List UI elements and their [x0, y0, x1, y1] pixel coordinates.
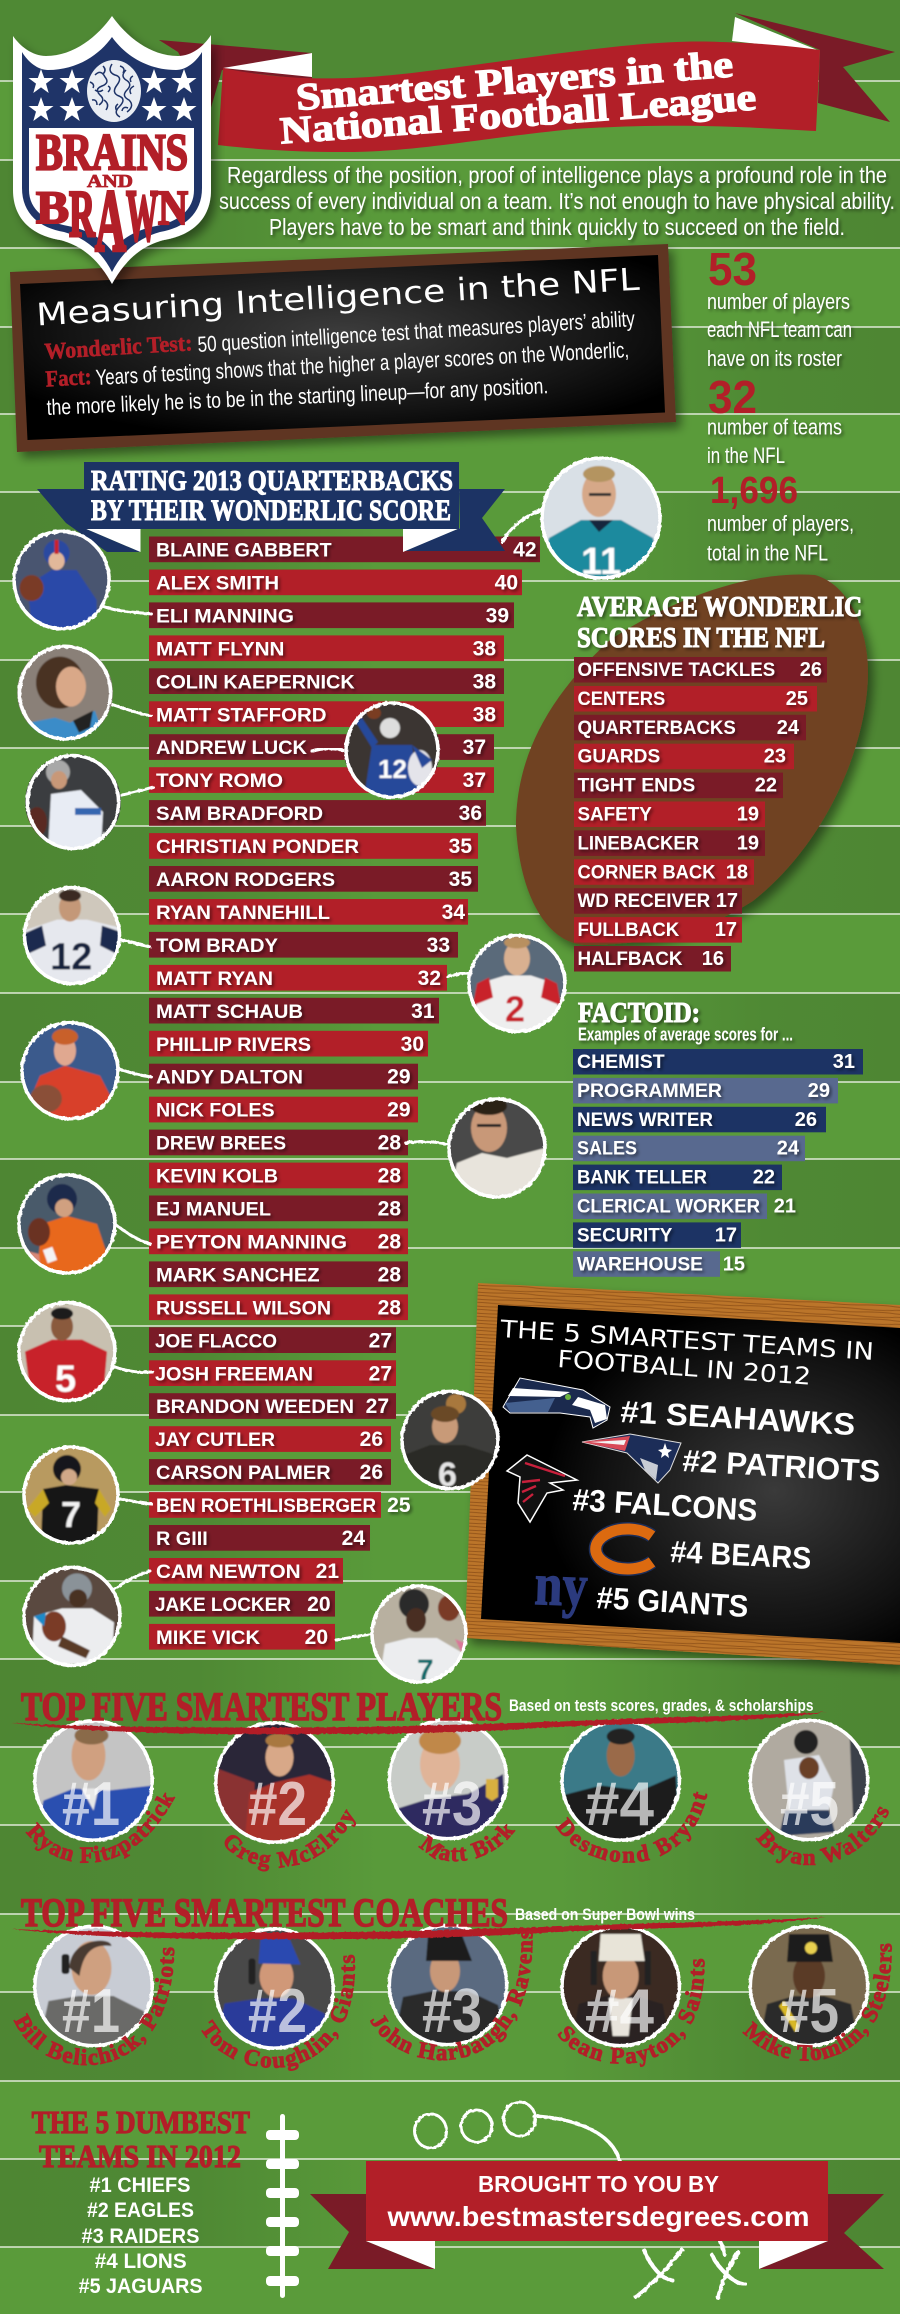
team: patriots — [582, 1434, 881, 1489]
bar: Joe Flacco 27 — [149, 1327, 396, 1353]
bar: Eli Manning 39: ELI MANNING — [156, 605, 294, 627]
bar: corner back 18: CORNER BACK — [578, 862, 716, 883]
bar: EJ Manuel 28: 28 — [378, 1198, 401, 1220]
bar: Mike Vick 20: 20 — [305, 1626, 328, 1649]
bar: security 17: SECURITY — [577, 1225, 673, 1246]
bar: Nick Foles 29 — [149, 1097, 418, 1122]
portrait: Russell Wilson: 5 — [55, 1359, 76, 1401]
shield logo: brains and brawn: N — [158, 180, 188, 235]
chalkboard: measuring intelligence: the more likely he is to be in the starting lineup—for any position. — [46, 373, 549, 420]
bar: Kevin Kolb 28: KEVIN KOLB — [156, 1166, 278, 1188]
bar: Alex Smith 40 — [149, 570, 522, 595]
bar: Kevin Kolb 28: 28 — [378, 1165, 401, 1188]
stats: roster numbers: number of players, — [707, 511, 854, 536]
shield logo: brains and brawn — [13, 16, 211, 284]
bar: Mark Sanchez 28: 28 — [378, 1263, 401, 1286]
title ribbon — [159, 13, 895, 152]
bar: Ryan Tannehill 34 — [149, 899, 468, 925]
stats: roster numbers: each NFL team can — [707, 317, 852, 342]
bar: programmer 29: PROGRAMMER — [577, 1081, 722, 1102]
bar: Andy Dalton 29: ANDY DALTON — [156, 1067, 303, 1089]
team: bears: #4 BEARS — [670, 1534, 812, 1576]
shield logo: brains and brawn: BRAINS — [36, 125, 188, 182]
bar: Aaron Rodgers 35 — [149, 866, 478, 892]
bar: Matt Ryan 32: MATT RYAN — [156, 968, 273, 990]
bar: Aaron Rodgers 35: AARON RODGERS — [156, 869, 335, 891]
bar: Josh Freeman 27 — [149, 1360, 396, 1386]
bar: Matt Stafford 38: 38 — [473, 703, 496, 726]
bar: Christian Ponder 35 — [149, 833, 478, 859]
heading: average wonderlic scores — [577, 592, 862, 654]
bar: news writer 26: 26 — [795, 1109, 817, 1131]
bar: corner back 18 — [574, 859, 754, 885]
bar: Ben Roethlisberger 25: 25 — [387, 1494, 411, 1517]
bar: programmer 29 — [573, 1078, 838, 1103]
rank overlays: #5 — [780, 1770, 839, 1839]
curved coach names: Sean Payton, Saints — [558, 1958, 705, 2067]
bar: Tony Romo 37 — [149, 767, 494, 793]
portrait: Drew Brees — [449, 1097, 545, 1197]
bar: Tom Brady 33 — [149, 932, 458, 958]
bar: Andy Dalton 29 — [149, 1064, 418, 1089]
bar: Matt Flynn 38: 38 — [473, 637, 496, 660]
portrait: Greg McElroy — [214, 1722, 334, 1842]
bar: Peyton Manning 28 — [149, 1228, 408, 1254]
team: falcons — [507, 1455, 758, 1528]
stats: roster numbers: number of players — [707, 289, 850, 314]
curved player names: Matt Birk — [418, 1824, 516, 1862]
portrait: Tom Brady — [24, 888, 120, 984]
portrait: Desmond Bryant — [562, 1720, 680, 1840]
bar: quarterbacks 24: QUARTERBACKS — [578, 718, 736, 739]
portrait: Brandon Weeden: 6 — [438, 1456, 457, 1494]
bar: Colin Kaepernick 38 — [149, 668, 504, 694]
banner: brought to you by — [310, 2161, 884, 2269]
chalkboard: measuring intelligence: Years of testing shows that the higher a player scores on the Wonderlic, — [95, 337, 630, 390]
stats: roster numbers: in the NFL — [707, 443, 785, 468]
portrait connectors — [98, 510, 542, 1640]
bar: Nick Foles 29: 29 — [387, 1099, 410, 1122]
bar: Jay Cutler 26: JAY CUTLER — [155, 1429, 275, 1451]
portrait: Matt Birk — [389, 1719, 507, 1839]
chalkboard: measuring intelligence: Wonderlic Test: — [44, 330, 193, 364]
bar: Russell Wilson 28 — [149, 1294, 408, 1320]
portrait: Matt Ryan — [469, 936, 565, 1032]
bar: guards 23: 23 — [764, 746, 786, 768]
curved player names: Bryan Walters — [755, 1806, 889, 1866]
blue banner: rating quarterbacks: RATING 2013 QUARTERBACKS — [91, 466, 453, 497]
stats: roster numbers: have on its roster — [707, 346, 842, 371]
rank overlays: #1 — [62, 1770, 120, 1839]
title ribbon: National Football League — [279, 76, 757, 152]
chalkboard: measuring intelligence: 50 question intelligence test that measures players’ ability — [197, 306, 636, 357]
bar: halfback 16: HALFBACK — [578, 949, 683, 970]
bar: Tony Romo 37: TONY ROMO — [156, 770, 283, 792]
bar: Matt Schaub 31 — [149, 998, 439, 1024]
rank overlays: #3 — [422, 1977, 482, 2046]
panel: five dumbest teams: TEAMS IN 2012 — [39, 2138, 241, 2174]
bar: Brandon Weeden 27: 27 — [366, 1395, 389, 1418]
bar: Carson Palmer 26: CARSON PALMER — [156, 1462, 331, 1484]
chalkboard: measuring intelligence: Measuring Intelligence in the NFL — [35, 262, 641, 333]
portrait: Mike Vick: 7 — [417, 1654, 434, 1687]
bar: Sam Bradford 36 — [149, 800, 486, 826]
chalkboard: five smartest teams: THE 5 SMARTEST TEAMS IN — [498, 1315, 875, 1366]
chalkboard: measuring intelligence — [10, 244, 676, 452]
bar: offensive tackles 26 — [574, 657, 827, 682]
factoid subheading: Examples of average scores for ... — [578, 1024, 793, 1044]
portrait: Ben Roethlisberger — [23, 1447, 119, 1543]
quarterback score bars — [149, 536, 540, 1650]
bar: EJ Manuel 28 — [149, 1196, 408, 1221]
bar: Andrew Luck 37 — [149, 734, 494, 760]
bar: Brandon Weeden 27 — [149, 1393, 396, 1419]
bar: safety 19: 19 — [737, 804, 759, 826]
bar: offensive tackles 26: 26 — [800, 659, 822, 681]
bar: sales 24 — [573, 1136, 805, 1161]
bar: Cam Newton 21: CAM NEWTON — [156, 1561, 301, 1583]
panel: five dumbest teams: #2 EAGLES — [87, 2199, 194, 2222]
bar: Cam Newton 21: 21 — [316, 1560, 339, 1583]
bar: Phillip Rivers 30 — [149, 1031, 428, 1056]
bar: fullback 17: 17 — [715, 919, 737, 941]
bar: clerical worker 21: CLERICAL WORKER — [577, 1196, 760, 1218]
bar: Peyton Manning 28: PEYTON MANNING — [156, 1232, 347, 1254]
bar: tight ends 22 — [574, 773, 783, 798]
bar: corner back 18: 18 — [726, 861, 748, 883]
bar: Josh Freeman 27: JOSH FREEMAN — [155, 1363, 313, 1385]
bar: news writer 26 — [573, 1107, 826, 1132]
portrait: Matt Ryan: 2 — [505, 988, 525, 1030]
bar: Josh Freeman 27: 27 — [369, 1362, 392, 1385]
bar: halfback 16 — [574, 946, 731, 972]
shield logo: brains and brawn: B — [36, 182, 69, 234]
blue banner: rating quarterbacks — [37, 462, 505, 552]
bar: wd receiver 17: 17 — [716, 890, 738, 912]
rank overlays: #4 — [585, 1977, 655, 2046]
bar: Jay Cutler 26 — [149, 1426, 391, 1452]
panel: five dumbest teams: THE 5 DUMBEST — [32, 2104, 250, 2140]
bar: clerical worker 21: 21 — [774, 1196, 796, 1218]
bar: clerical worker 21 — [573, 1194, 796, 1219]
bar: Eli Manning 39 — [149, 602, 514, 628]
bar: EJ Manuel 28: EJ MANUEL — [156, 1198, 271, 1220]
bar: Drew Brees 28: 28 — [378, 1132, 401, 1155]
rank overlays: #3 — [422, 1770, 482, 1839]
bar: Colin Kaepernick 38: 38 — [473, 670, 496, 693]
bar: Carson Palmer 26: 26 — [360, 1461, 383, 1484]
bar: Joe Flacco 27: 27 — [369, 1329, 392, 1352]
bar: Andy Dalton 29: 29 — [387, 1066, 410, 1089]
bar: Russell Wilson 28: RUSSELL WILSON — [156, 1297, 331, 1319]
portrait: Sean Payton — [562, 1926, 680, 2046]
portrait: Russell Wilson — [19, 1303, 115, 1401]
bar: Drew Brees 28: DREW BREES — [156, 1133, 286, 1155]
bar: Jake Locker 20: 20 — [307, 1593, 330, 1616]
portrait: Matt Stafford — [17, 645, 113, 741]
bar: offensive tackles 26: OFFENSIVE TACKLES — [578, 660, 775, 681]
portrait: Mike Vick — [371, 1586, 467, 1687]
bar: centers 25 — [574, 686, 817, 712]
team: seahawks — [503, 1378, 856, 1442]
panel: average wonderlic scores — [574, 592, 862, 972]
bar: Christian Ponder 35: 35 — [449, 835, 472, 858]
bar: Andrew Luck 37: 37 — [463, 736, 486, 759]
stats: roster numbers: number of teams — [707, 415, 842, 440]
bar: quarterbacks 24: 24 — [777, 717, 800, 739]
heading: top five smartest coaches: TOP FIVE SMARTEST COACHES — [21, 1890, 508, 1935]
bar: chemist 31: CHEMIST — [577, 1052, 665, 1073]
shield logo: brains and brawn: R — [69, 177, 96, 251]
bar: Drew Brees 28 — [149, 1130, 408, 1155]
bar: quarterbacks 24 — [574, 715, 806, 740]
bar: Phillip Rivers 30: PHILLIP RIVERS — [156, 1034, 311, 1056]
bar: Kevin Kolb 28 — [149, 1163, 408, 1188]
bar: Mike Vick 20: MIKE VICK — [156, 1627, 260, 1649]
bar: Mike Vick 20 — [149, 1624, 335, 1650]
bar: Cam Newton 21 — [149, 1558, 343, 1584]
stats: roster numbers: 53 — [708, 243, 757, 295]
bar: Tony Romo 37: 37 — [463, 769, 486, 792]
curved coach names — [13, 1933, 892, 2071]
chalk play diagram — [414, 2102, 745, 2298]
portrait: Ben Roethlisberger: 7 — [61, 1494, 81, 1535]
brush underline — [11, 1712, 826, 1734]
bar: safety 19: SAFETY — [578, 804, 652, 826]
bar: Tom Brady 33: TOM BRADY — [156, 935, 278, 957]
curved coach names: John Harbaugh, Ravens — [370, 1933, 533, 2061]
bar: Nick Foles 29: NICK FOLES — [156, 1100, 274, 1122]
bar: Colin Kaepernick 38: COLIN KAEPERNICK — [156, 671, 355, 693]
portrait: Andrew Luck: 12 — [378, 754, 407, 784]
portrait: Tony Romo — [25, 754, 121, 850]
portrait: Bryan Walters — [750, 1720, 868, 1840]
bar: Brandon Weeden 27: BRANDON WEEDEN — [156, 1396, 354, 1418]
bar: Alex Smith 40: 40 — [495, 572, 518, 594]
bar: programmer 29: 29 — [808, 1080, 830, 1102]
shield logo: brains and brawn: A — [95, 171, 126, 269]
portrait: Eli Manning — [14, 531, 110, 629]
bar: Jake Locker 20: JAKE LOCKER — [155, 1594, 291, 1616]
portrait: Andy Dalton — [22, 1023, 118, 1119]
portrait: Blaine Gabbert — [541, 458, 661, 583]
bar: halfback 16: 16 — [702, 948, 724, 970]
bar: sales 24: SALES — [577, 1139, 637, 1160]
curved coach names: Tom Coughlin, Giants — [201, 1954, 356, 2071]
bar: Matt Ryan 32: 32 — [418, 967, 441, 990]
team: giants — [534, 1551, 749, 1624]
bar: Matt Stafford 38 — [149, 701, 504, 727]
team: giants: #5 GIANTS — [596, 1580, 749, 1624]
bar: linebacker 19: 19 — [737, 832, 759, 854]
icon: stars — [28, 69, 196, 121]
bar: Carson Palmer 26 — [149, 1459, 391, 1485]
stats: roster numbers: 1,696 — [710, 470, 798, 512]
bar: R GIII 24: 24 — [342, 1527, 365, 1550]
bar: Matt Schaub 31: MATT SCHAUB — [156, 1001, 303, 1023]
portrait: Tom Brady: 12 — [50, 937, 92, 979]
subheading: based on tests: Based on tests scores, grades, & scholarships — [509, 1696, 814, 1715]
heading: average wonderlic scores: SCORES IN THE NFL — [577, 623, 825, 654]
bar: warehouse 15: 15 — [723, 1253, 745, 1275]
panel: factoid scores — [573, 997, 863, 1277]
panel: five dumbest teams — [32, 2104, 250, 2298]
bar: chemist 31: 31 — [833, 1051, 855, 1073]
panel: five dumbest teams: #1 CHIEFS — [90, 2174, 190, 2197]
bar: Matt Flynn 38: MATT FLYNN — [156, 638, 284, 660]
subheading: based on super bowl wins: Based on Super Bowl wins — [515, 1905, 695, 1924]
banner: brought to you by: www.bestmastersdegrees.com — [386, 2201, 810, 2232]
team: falcons: #3 FALCONS — [572, 1482, 758, 1528]
shield logo: brains and brawn: W — [126, 176, 158, 256]
bar: tight ends 22: 22 — [755, 775, 777, 797]
stats: roster numbers — [707, 243, 854, 566]
football shape — [516, 574, 868, 945]
bar: R GIII 24: R GIII — [156, 1528, 208, 1550]
team: patriots: #2 PATRIOTS — [682, 1443, 881, 1489]
bar: Matt Ryan 32 — [149, 965, 447, 991]
portrait: Brandon Weeden — [402, 1391, 498, 1494]
portrait: Mike Tomlin — [750, 1926, 868, 2046]
bar: Aaron Rodgers 35: 35 — [449, 868, 472, 891]
bar: Blaine Gabbert 42: 42 — [513, 538, 536, 562]
chalkboard: measuring intelligence: Fact: — [45, 364, 92, 392]
bar: Matt Stafford 38: MATT STAFFORD — [156, 704, 326, 726]
rank overlays — [62, 1770, 839, 1839]
bar: fullback 17 — [574, 917, 742, 943]
bar: Matt Flynn 38 — [149, 635, 504, 661]
icon: brain — [87, 60, 141, 122]
blue banner: rating quarterbacks: BY THEIR WONDERLIC SCORE — [91, 494, 451, 527]
curved player names: Ryan Fitzpatrick — [25, 1792, 176, 1864]
bar: security 17: 17 — [715, 1224, 737, 1246]
bar: Blaine Gabbert 42: BLAINE GABBERT — [156, 540, 332, 562]
bar: Sam Bradford 36: SAM BRADFORD — [156, 803, 323, 825]
bar: sales 24: 24 — [777, 1138, 800, 1160]
panel: five dumbest teams: #3 RAIDERS — [82, 2225, 200, 2248]
bar: bank teller 22: BANK TELLER — [577, 1168, 707, 1189]
bar: centers 25: 25 — [786, 688, 808, 710]
bar: Sam Bradford 36: 36 — [459, 802, 482, 825]
title ribbon: Smartest Players in the — [294, 43, 734, 119]
section: top five smartest players — [12, 1684, 889, 1872]
curved coach names: Mike Tomlin, Steelers — [742, 1943, 892, 2062]
panel: five dumbest teams: #5 JAGUARS — [79, 2275, 203, 2298]
bar: bank teller 22: 22 — [753, 1167, 775, 1189]
portrait: Andrew Luck — [344, 702, 440, 798]
bar: Alex Smith 40: ALEX SMITH — [156, 572, 279, 594]
rank overlays — [62, 1977, 839, 2046]
section: top five smartest coaches — [12, 1890, 892, 2071]
stats: roster numbers: total in the NFL — [707, 540, 828, 566]
icon: yard marker — [266, 2114, 299, 2298]
bar: Phillip Rivers 30: 30 — [401, 1033, 424, 1056]
heading: top five smartest players: TOP FIVE SMARTEST PLAYERS — [21, 1684, 502, 1729]
bar: bank teller 22 — [573, 1165, 782, 1190]
bar: Christian Ponder 35: CHRISTIAN PONDER — [156, 836, 359, 858]
shield logo: brains and brawn: AND — [87, 171, 133, 191]
bar: Eli Manning 39: 39 — [486, 604, 509, 627]
bar: wd receiver 17 — [574, 888, 742, 914]
bar: warehouse 15: WAREHOUSE — [577, 1254, 703, 1275]
bar: Mark Sanchez 28 — [149, 1261, 408, 1287]
heading: factoid: FACTOID: — [578, 997, 700, 1029]
brush underline — [11, 1917, 826, 1939]
bar: warehouse 15 — [573, 1251, 745, 1277]
portrait: Cam Newton — [24, 1567, 120, 1665]
bar: Jake Locker 20 — [149, 1591, 335, 1617]
bar: tight ends 22: TIGHT ENDS — [578, 776, 695, 797]
bar: Tom Brady 33: 33 — [427, 934, 450, 957]
bar: Ryan Tannehill 34: 34 — [442, 901, 465, 924]
bar: Mark Sanchez 28: MARK SANCHEZ — [156, 1264, 320, 1286]
bar: Jay Cutler 26: 26 — [360, 1428, 383, 1451]
bar: Peyton Manning 28: 28 — [378, 1230, 401, 1254]
rank overlays: #2 — [248, 1770, 307, 1839]
bar: wd receiver 17: WD RECEIVER — [578, 891, 710, 912]
portrait: Peyton Manning — [19, 1175, 115, 1273]
bar: R GIII 24 — [149, 1525, 370, 1551]
bar: safety 19 — [574, 802, 765, 827]
team: bears — [596, 1529, 812, 1576]
portrait: Blaine Gabbert: 11 — [581, 541, 621, 583]
bar: guards 23 — [574, 744, 794, 769]
chalkboard: five smartest teams: FOOTBALL IN 2012 — [557, 1345, 812, 1391]
team: seahawks: #1 SEAHAWKS — [620, 1394, 856, 1442]
bar: Andrew Luck 37: ANDREW LUCK — [156, 737, 307, 759]
bar: security 17 — [573, 1222, 741, 1248]
bar: guards 23: GUARDS — [578, 747, 660, 768]
bar: Matt Schaub 31: 31 — [411, 1000, 435, 1023]
bar: Russell Wilson 28: 28 — [378, 1296, 401, 1319]
rank overlays: #2 — [248, 1977, 307, 2046]
bar: Ryan Tannehill 34: RYAN TANNEHILL — [156, 902, 330, 924]
team: giants: ny — [534, 1551, 589, 1619]
bar: chemist 31 — [573, 1049, 863, 1074]
bar: fullback 17: FULLBACK — [578, 920, 679, 941]
portrait: John Harbaugh — [389, 1925, 507, 2045]
portrait: Bill Belichick — [34, 1926, 152, 2046]
stats: roster numbers: 32 — [708, 371, 757, 423]
chalkboard: five smartest teams — [465, 1283, 900, 1665]
heading: average wonderlic scores: AVERAGE WONDERLIC — [577, 592, 862, 623]
bar: centers 25: CENTERS — [578, 689, 665, 710]
bar: linebacker 19: LINEBACKER — [578, 833, 699, 854]
bar: Joe Flacco 27: JOE FLACCO — [155, 1330, 277, 1352]
banner: brought to you by: BROUGHT TO YOU BY — [478, 2171, 719, 2197]
portrait: Tom Coughlin — [216, 1928, 334, 2048]
rank overlays: #5 — [780, 1977, 839, 2046]
curved player names: Desmond Bryant — [555, 1792, 708, 1863]
curved player names: Greg McElroy — [224, 1809, 356, 1872]
bar: Blaine Gabbert 42 — [149, 536, 540, 562]
intro paragraph — [219, 162, 895, 240]
bar: news writer 26: NEWS WRITER — [577, 1110, 713, 1131]
bar: linebacker 19 — [574, 830, 765, 856]
portrait: Ryan Fitzpatrick — [34, 1720, 152, 1840]
bar: Ben Roethlisberger 25: BEN ROETHLISBERGER — [156, 1495, 376, 1517]
curved player names — [25, 1792, 889, 1872]
panel: five dumbest teams: #4 LIONS — [95, 2250, 187, 2273]
rank overlays: #4 — [585, 1770, 655, 1839]
curved coach names: Bill Belichick, Patriots — [13, 1947, 175, 2066]
rank overlays: #1 — [62, 1977, 120, 2046]
